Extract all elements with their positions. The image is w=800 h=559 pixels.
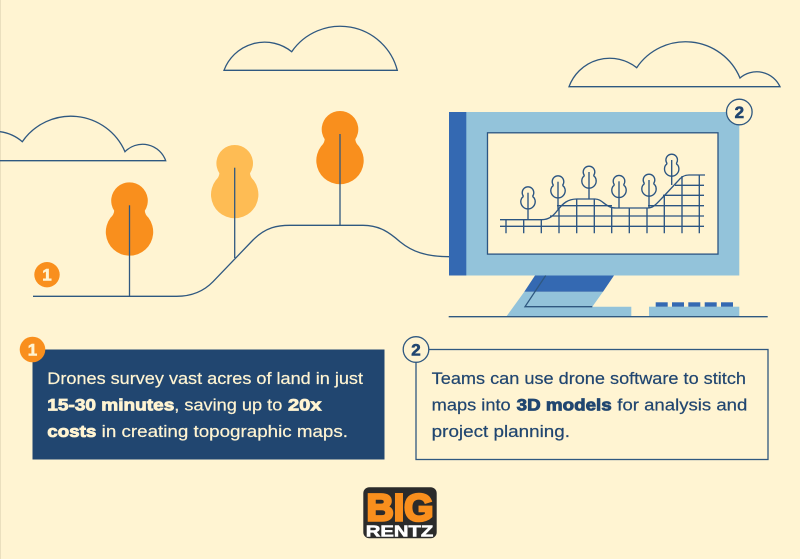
keyboard (649, 302, 739, 316)
monitor screen (488, 133, 718, 254)
panel 2 badge (403, 337, 429, 362)
tree: right orange (316, 111, 364, 225)
panel 2 copy: maps into (432, 396, 511, 414)
mini tree 1 (521, 187, 535, 220)
panel 1 copy: in creating topographic maps. (102, 423, 348, 441)
mini tree 3 (582, 166, 596, 199)
panel: step 1 text (20, 337, 384, 460)
panel 2 copy: 3D models (517, 396, 612, 414)
monitor stand (507, 276, 631, 316)
panel 2 copy: Teams can use drone software to stitch (432, 370, 746, 388)
mini tree 5 (642, 174, 656, 208)
landscape: hills and trees (33, 111, 449, 296)
badge: step 2 on monitor: 2 (735, 103, 744, 122)
monitor bezel (449, 112, 739, 276)
logo: BigRentz: RENTZ (366, 523, 434, 540)
panel 1 copy: , saving up to (174, 396, 282, 414)
computer monitor (449, 112, 768, 317)
cloud: top right (569, 42, 780, 87)
tree: middle light orange (211, 145, 258, 258)
panel: step 2 text (403, 337, 768, 460)
monitor side panel (449, 112, 466, 276)
grid lines (500, 175, 704, 233)
panel 2 badge: 2 (411, 340, 421, 360)
panel 1 copy: costs (47, 423, 96, 441)
terrain profile (500, 175, 705, 220)
panel 2 outline (416, 350, 768, 460)
badge: step 2 on monitor (726, 99, 752, 125)
panel 2 copy (432, 370, 747, 441)
badge: step 1 on landscape: 1 (42, 266, 52, 285)
topographic grid chart on screen (500, 154, 705, 233)
panel 2 copy: for analysis and (617, 396, 747, 414)
cloud: left (0, 116, 166, 161)
mini tree 4 (612, 175, 626, 208)
tree: left orange (106, 182, 153, 296)
mini tree 6 (664, 154, 679, 185)
panel 1 background (32, 350, 384, 460)
panel 2 copy: project planning. (432, 423, 570, 441)
ground line (33, 225, 449, 296)
panel 1 copy: 20x (288, 396, 322, 414)
badge: step 1 on landscape (34, 262, 60, 287)
logo: BigRentz: BIG (366, 487, 434, 529)
panel 1 badge: 1 (28, 340, 37, 360)
panel 1 copy: Drones survey vast acres of land in just (47, 370, 363, 388)
desk line (449, 316, 768, 318)
panel 1 copy (47, 370, 363, 441)
panel 1 copy: 15-30 minutes (47, 396, 174, 414)
panel 1 badge (20, 337, 45, 362)
mini tree 2 (551, 176, 565, 209)
cloud: top centre (224, 26, 397, 70)
